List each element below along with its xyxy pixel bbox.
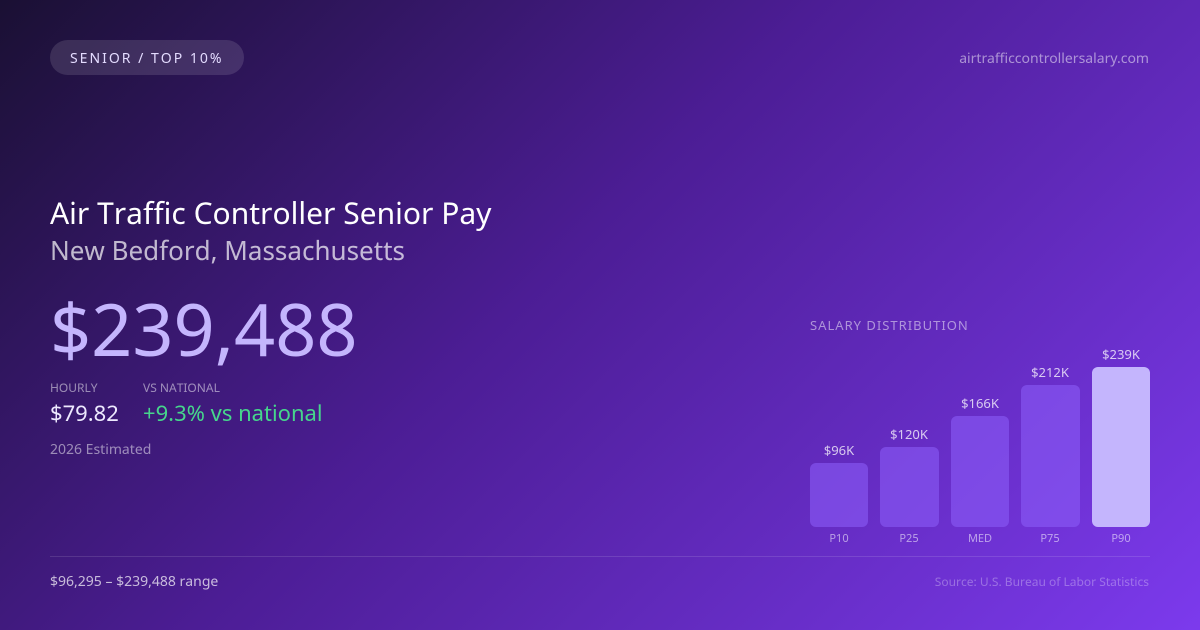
source: Source: U.S. Bureau of Labor Statistics [935,573,1149,590]
axis MED: MED [968,531,992,546]
value P10: $96K [824,441,854,459]
stat: hourly [50,379,119,428]
value P90: $239K [1102,345,1140,363]
bar chart: salary distribution [810,316,1150,546]
badge: senior / top 10%: SENIOR / TOP 10% [70,49,223,68]
bar P10 [810,463,868,527]
title: Air Traffic Controller Senior Pay [50,192,491,233]
site url: airtrafficcontrollersalary.com [959,49,1149,68]
axis P90: P90 [1111,531,1131,546]
axis P75: P75 [1040,531,1060,546]
bar P25 [880,447,939,527]
stat: vs national [143,379,323,428]
value MED: $166K [961,394,999,412]
bar MED [951,416,1009,527]
bar P90 [1092,367,1150,527]
vs national label: VS NATIONAL [143,379,220,396]
hourly label: HOURLY [50,379,98,396]
badge: senior / top 10% [50,40,244,75]
headline salary: $239,488 [50,280,358,378]
axis P25: P25 [899,531,919,546]
hourly value: $79.82 [50,398,119,428]
chart heading: SALARY DISTRIBUTION [810,316,969,334]
estimate note: 2026 Estimated [50,440,151,459]
value P25: $120K [890,425,928,443]
subtitle: location: New Bedford, Massachusetts [50,232,405,268]
axis P10: P10 [829,531,849,546]
salary range: $96,295 – $239,488 range [50,572,218,591]
value P75: $212K [1031,363,1069,381]
bar P75 [1021,385,1080,527]
vs national value: +9.3% vs national [143,398,323,428]
